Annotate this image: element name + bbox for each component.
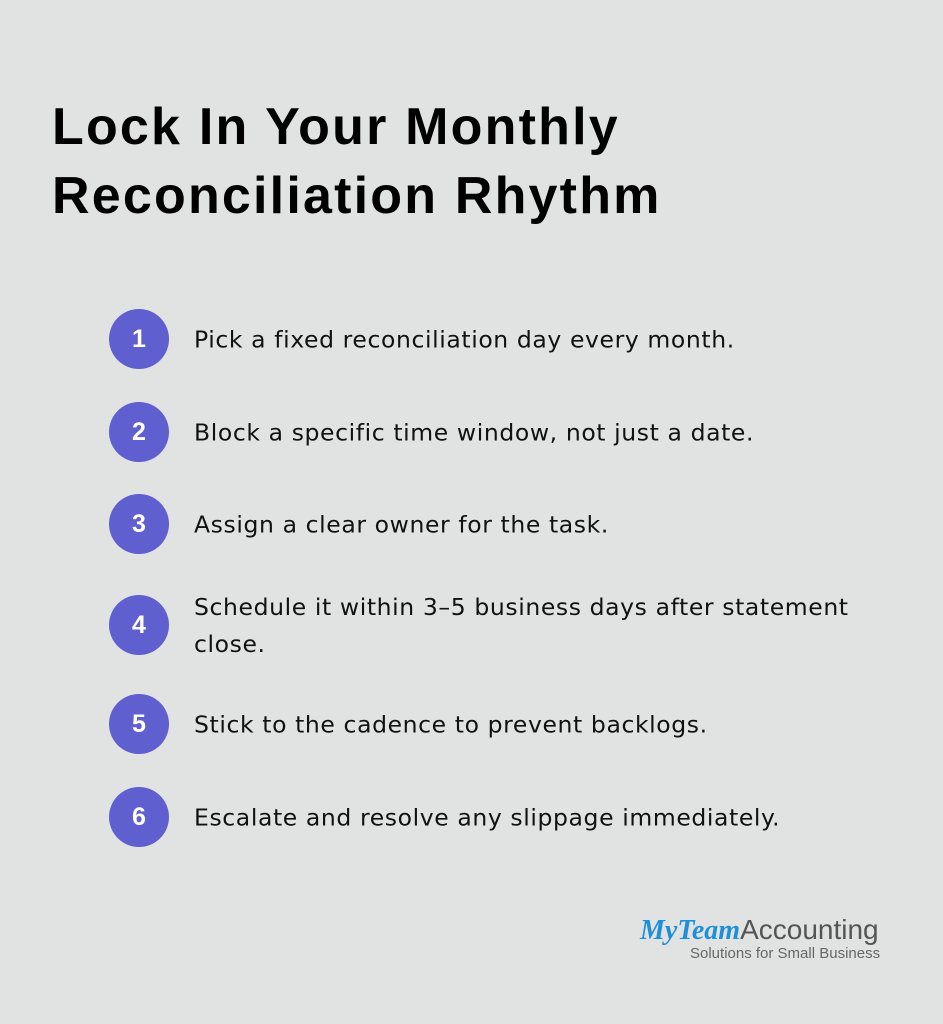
item 6: 6 [132,803,146,831]
item 2: 2 [132,418,146,446]
item 5 [109,694,708,754]
item 4: close. [194,630,266,658]
item 4: 4 [132,611,146,639]
title [52,98,662,225]
title: Lock In Your Monthly [52,98,620,156]
item 3: 3 [132,510,146,538]
item 3: Assign a clear owner for the task. [194,510,609,538]
item 6: Escalate and resolve any slippage immediately. [194,804,780,832]
item 1: 1 [132,325,146,353]
item 6 [109,787,780,847]
item 4 [109,593,849,658]
item 1: Pick a fixed reconciliation day every month. [194,326,735,354]
item 1 [109,309,735,369]
item 5: 5 [132,710,146,738]
item 4: Schedule it within 3–5 business days after statement [194,593,849,621]
item 5: Stick to the cadence to prevent backlogs. [194,710,708,738]
item 2: Block a specific time window, not just a date. [194,418,754,446]
item 3 [109,494,609,554]
logo: MyTeamAccounting [640,914,879,946]
title: Reconciliation Rhythm [52,167,662,225]
item 2 [109,402,754,462]
logo [640,914,880,962]
logo: Solutions for Small Business [690,945,880,962]
